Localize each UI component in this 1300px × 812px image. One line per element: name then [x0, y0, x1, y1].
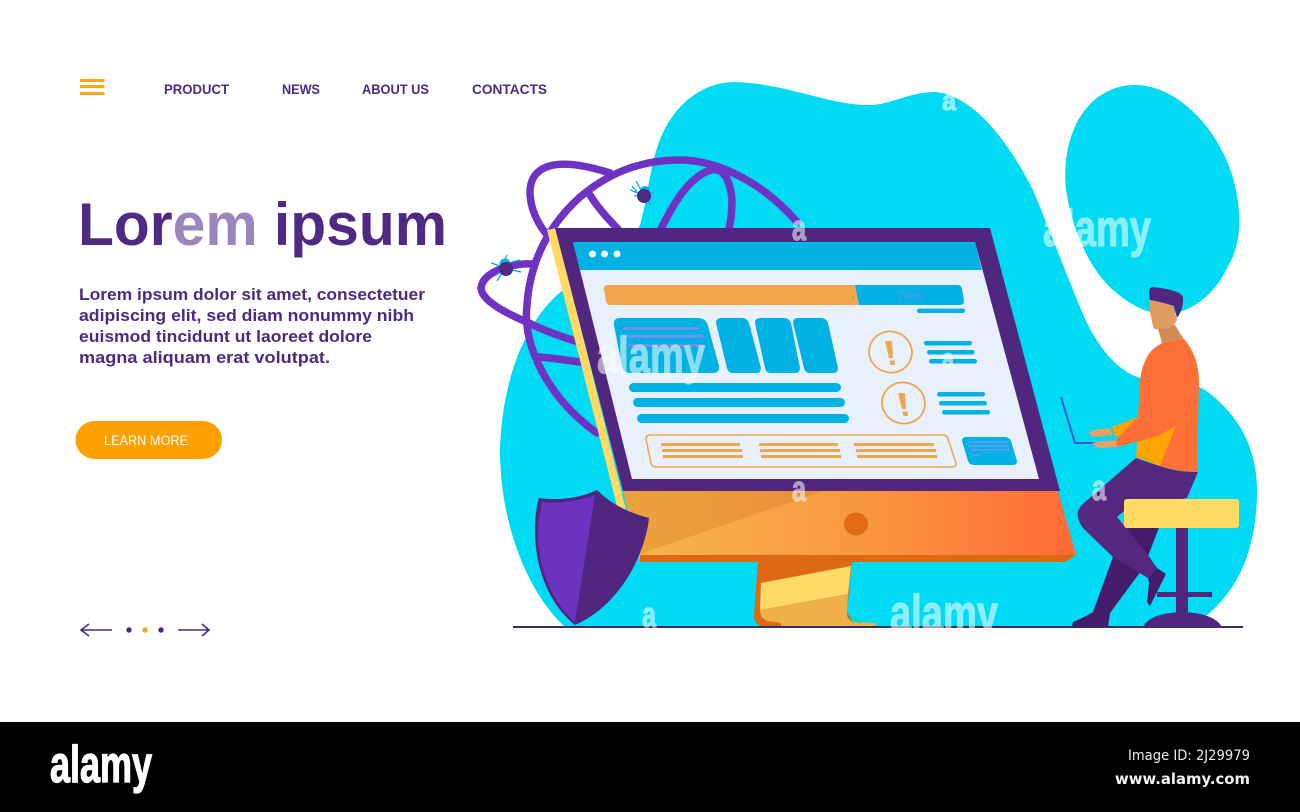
watermark: a [792, 207, 807, 248]
body text: adipiscing elit, sed diam nonummy nibh [79, 306, 414, 325]
background blob large [500, 82, 1257, 627]
browser header [573, 242, 982, 270]
ground line [513, 626, 1243, 628]
foot [1147, 568, 1166, 606]
globe with orbits [481, 160, 797, 433]
body text: Lorem ipsum dolor sit amet, consectetuer [79, 285, 425, 304]
body text [79, 285, 425, 367]
outlined footer box [646, 435, 956, 467]
footer bar [0, 722, 1300, 812]
watermark: a [942, 343, 954, 374]
monitor base [623, 491, 1076, 562]
person on stool [1061, 287, 1239, 627]
window dots [589, 250, 620, 258]
watermark: a [1092, 467, 1107, 508]
sweater [1116, 338, 1199, 472]
watermark: a [942, 85, 956, 116]
progress bar [604, 285, 965, 313]
hands [1088, 428, 1118, 448]
watermark: a [642, 594, 657, 635]
navigation menu: PRODUCT [164, 81, 229, 97]
watermark: alamy [890, 585, 998, 643]
navigation menu: ABOUT US [362, 81, 429, 97]
face [1150, 300, 1177, 329]
body text: euismod tincidunt ut laoreet dolore [79, 327, 372, 346]
learn more button [76, 421, 222, 459]
neck [1158, 325, 1183, 343]
hamburger menu icon [80, 79, 104, 95]
background blob small [1065, 85, 1239, 314]
alert icon one [864, 327, 917, 377]
navigation menu: NEWS [282, 81, 320, 97]
small blue card [962, 437, 1017, 465]
alert text lines two [937, 392, 990, 414]
website: www.alamy.com [1115, 770, 1250, 788]
body text: magna aliquam erat volutpat. [79, 348, 330, 367]
text lines left [629, 383, 849, 423]
back leg [1072, 557, 1150, 627]
card text lines [622, 327, 703, 347]
shield [535, 490, 649, 625]
hair [1149, 287, 1183, 318]
watermark: alamy [1043, 200, 1151, 258]
title: Lorem ipsum [78, 191, 447, 258]
alert icon two [877, 378, 930, 428]
learn more button: LEARN MORE [104, 432, 188, 448]
navigation menu [164, 81, 547, 97]
monitor frame [555, 228, 1060, 491]
navigation menu: CONTACTS [472, 81, 547, 97]
laptop [1061, 397, 1096, 443]
watermark: alamy [597, 327, 705, 385]
alert text lines one [924, 341, 977, 364]
content cards [614, 318, 838, 373]
monitor stand [754, 560, 876, 626]
stool seat [1124, 499, 1239, 528]
pagination arrows and dots [81, 624, 209, 636]
watermark [597, 85, 1151, 643]
progress bar: 70% [897, 289, 924, 303]
image id: Image ID: 2J29979 [1128, 748, 1250, 764]
front leg [1078, 458, 1198, 578]
monitor screen [573, 242, 1039, 479]
watermark: a [792, 468, 807, 509]
under thigh shadow [1125, 525, 1160, 556]
bug icon left [491, 255, 521, 281]
stool [1143, 528, 1222, 627]
alamy logo: alamy [50, 736, 152, 794]
sleeve and shirt [1112, 417, 1178, 466]
monitor yellow edge [547, 228, 626, 510]
bug icon top [630, 181, 653, 205]
